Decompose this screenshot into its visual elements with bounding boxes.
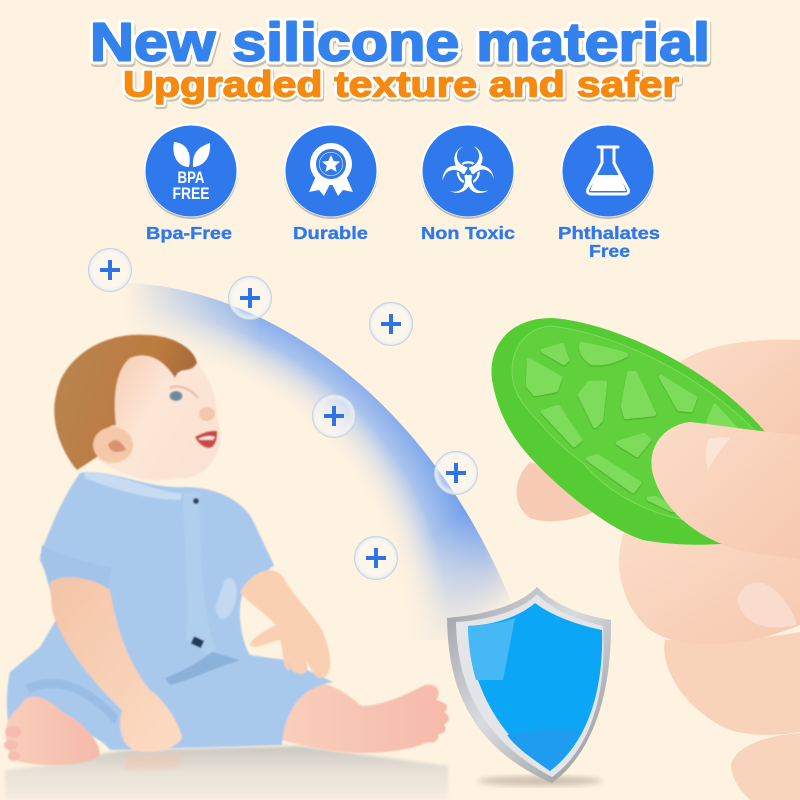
baby left foot bbox=[4, 697, 100, 765]
shield face bbox=[468, 603, 602, 771]
teether pads bbox=[528, 344, 736, 510]
fingernail bbox=[737, 583, 797, 627]
protective blue arc bbox=[125, 283, 512, 640]
bubble 2 bbox=[228, 276, 272, 320]
feature: non toxic bbox=[421, 123, 515, 219]
hand: pinky finger bbox=[731, 733, 800, 800]
icon: award rosette bbox=[309, 143, 353, 196]
baby romper bbox=[7, 472, 333, 755]
heading: New silicone material: New silicone material bbox=[90, 12, 710, 72]
hand: fingertip behind teether bbox=[516, 462, 594, 521]
baby right leg bbox=[282, 684, 449, 753]
hand: thumb bbox=[651, 422, 800, 560]
shield frame bbox=[447, 587, 611, 783]
thumb nail highlight bbox=[706, 437, 730, 470]
label: Phthalates Free bbox=[558, 223, 660, 261]
baby eyebrow shadow bbox=[170, 386, 198, 398]
label: Durable: Durable bbox=[293, 223, 368, 243]
baby hair bbox=[54, 335, 197, 470]
label: Phthalates Free: Phthalates bbox=[558, 223, 660, 243]
floor reflection bbox=[5, 746, 448, 800]
baby mouth bbox=[195, 431, 217, 448]
baby right arm and hand bbox=[240, 570, 330, 678]
subheading: Upgraded texture and safer: Upgraded texture and safer bbox=[124, 66, 680, 106]
baby ear bbox=[93, 427, 133, 463]
label: Bpa-Free: Bpa-Free bbox=[146, 223, 232, 243]
baby head bbox=[54, 335, 220, 480]
feature: durable bbox=[284, 123, 378, 219]
icon text: BPA FREE: BPA bbox=[178, 168, 204, 187]
heading: New silicone material: New silicone material bbox=[91, 15, 711, 75]
icon text: BPA FREE bbox=[172, 168, 210, 203]
hand and teether bbox=[492, 318, 800, 800]
baby bbox=[4, 335, 449, 765]
baby nose bbox=[199, 407, 215, 421]
subheading: Upgraded texture and safer: Upgraded texture and safer bbox=[123, 64, 679, 104]
bubble 3 bbox=[369, 302, 413, 346]
label: Non Toxic: Non Toxic bbox=[421, 223, 515, 243]
baby eye bbox=[170, 391, 182, 401]
title bbox=[90, 12, 711, 106]
label: Phthalates Free: Free bbox=[589, 241, 630, 261]
bubble 1 bbox=[88, 248, 132, 292]
bubble 4 bbox=[312, 394, 356, 438]
icon: biohazard: ☣ bbox=[439, 135, 497, 209]
bubble 6 bbox=[354, 536, 398, 580]
teether inner face bbox=[512, 326, 758, 522]
icon: leaves bbox=[173, 142, 210, 167]
subheading: Upgraded texture and safer: Upgraded texture and safer bbox=[123, 64, 679, 104]
baby left arm bbox=[50, 577, 182, 752]
icon: flask bbox=[588, 147, 628, 194]
shield shadow bbox=[478, 776, 602, 786]
icon text: BPA FREE: FREE bbox=[172, 184, 210, 203]
bubble 5 bbox=[434, 451, 478, 495]
hand: back of fist bbox=[680, 340, 800, 450]
feature: phthalates free bbox=[561, 123, 655, 219]
heading: New silicone material: New silicone material bbox=[90, 12, 710, 72]
bubbles bbox=[88, 248, 478, 580]
teether body bbox=[492, 318, 766, 545]
hand: middle finger bbox=[619, 530, 800, 644]
feature: BPA free bbox=[144, 123, 238, 219]
shield bbox=[447, 587, 611, 786]
hand: ring finger bbox=[664, 632, 800, 735]
